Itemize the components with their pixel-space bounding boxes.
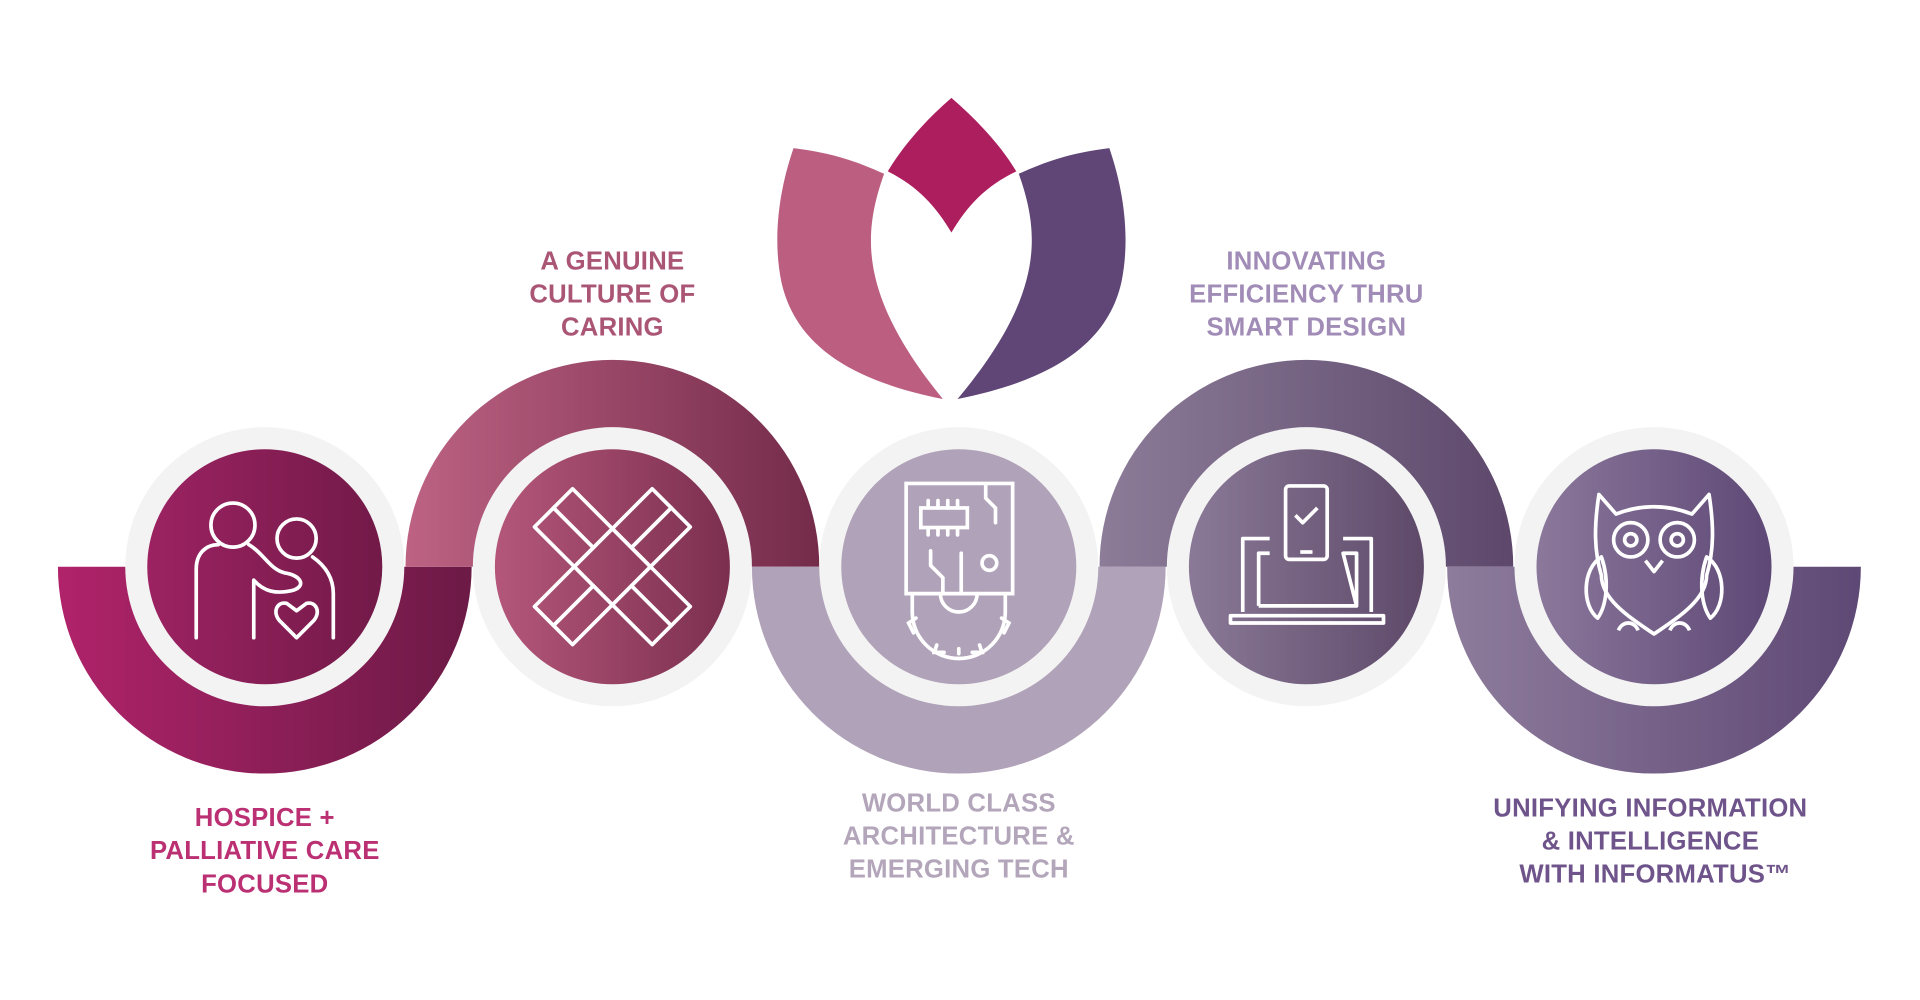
label: world class: EMERGING TECH [849,856,1069,884]
circle 3: circuit gear icon [819,427,1098,706]
label: unifying information: & INTELLIGENCE [1542,827,1759,855]
label: genuine culture: A GENUINE [540,247,684,275]
label: world class [843,790,1075,884]
label: world class: ARCHITECTURE & [843,823,1075,851]
label: world class: WORLD CLASS [862,790,1056,818]
label: unifying information: WITH INFORMATUS™ [1519,860,1791,888]
label: innovating efficiency: INNOVATING [1226,247,1386,275]
label: innovating efficiency: EFFICIENCY THRU [1189,280,1424,308]
label: hospice: PALLIATIVE CARE [150,837,380,865]
wave band [58,360,1861,774]
circle 5: owl icon [1514,427,1794,706]
label: genuine culture [529,247,695,341]
circle 2: hands icon [473,427,752,706]
label: genuine culture: CARING [561,313,664,341]
label: unifying information [1493,794,1807,888]
label: unifying information: UNIFYING INFORMATION [1493,794,1807,822]
logo: lotus [777,98,1126,399]
circle 4: devices icon [1167,427,1446,706]
label: genuine culture: CULTURE OF [529,280,695,308]
label: innovating efficiency [1189,247,1424,341]
circle 1: hospice icon [125,427,404,706]
label: hospice: HOSPICE + [195,804,335,832]
label: hospice [150,804,380,898]
label: hospice: FOCUSED [201,870,328,898]
label: innovating efficiency: SMART DESIGN [1206,313,1406,341]
